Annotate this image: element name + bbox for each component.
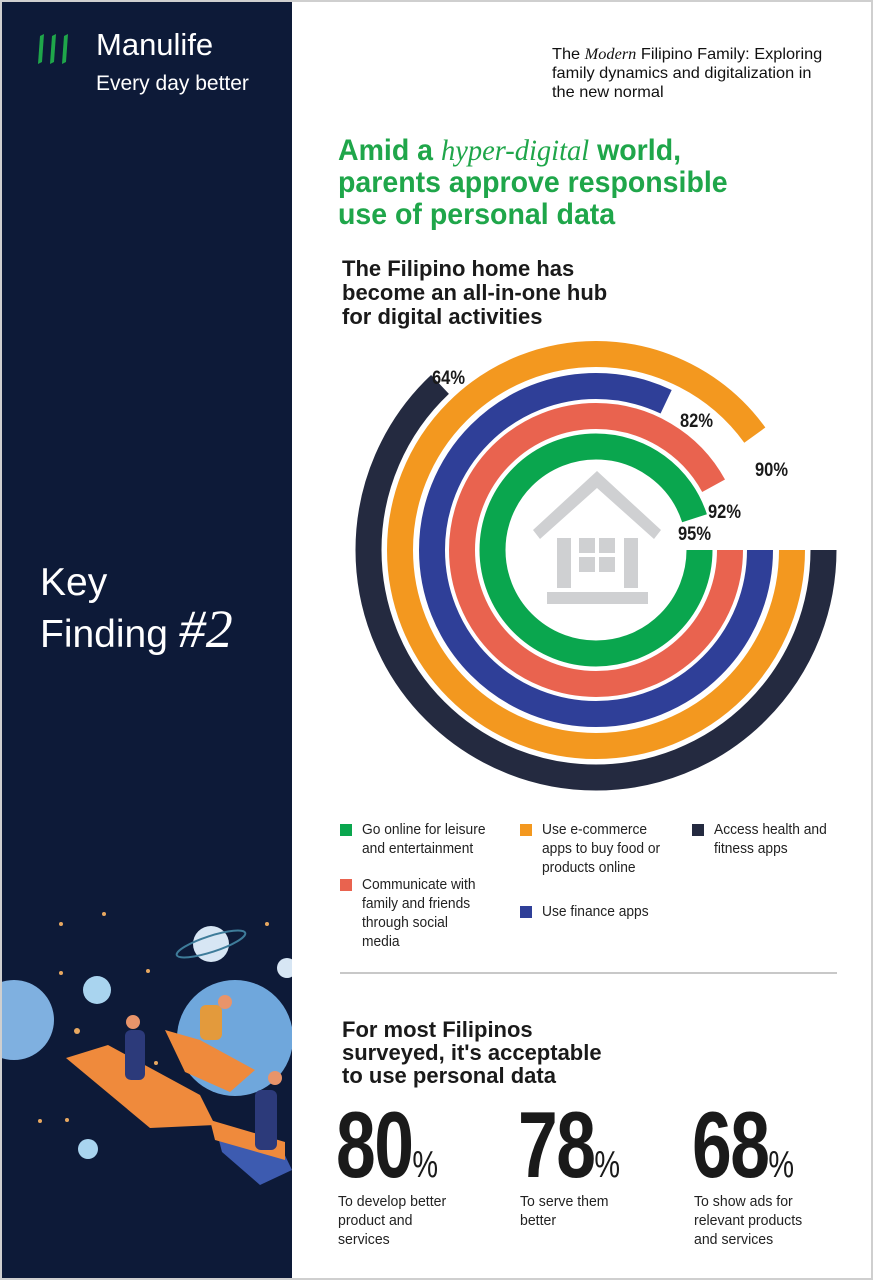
- legend: Communicate with: [362, 876, 476, 893]
- legend: family and friends: [362, 895, 470, 912]
- key finding heading: Key: [40, 561, 107, 604]
- legend: and entertainment: [362, 840, 473, 857]
- chart value labels: 64%: [432, 368, 465, 389]
- section heading: personal data: For most Filipinos: [342, 1017, 533, 1042]
- subheading: become an all-in-one hub: [342, 280, 607, 305]
- chart value labels: 95%: [678, 524, 711, 545]
- stat 80%: To develop better: [338, 1193, 446, 1210]
- main headline: [338, 134, 728, 231]
- stat 68%: and services: [694, 1231, 773, 1248]
- stat 80%: [336, 1092, 446, 1248]
- illustration: space rockets: [2, 912, 292, 1185]
- stat 78%: 78%: [518, 1092, 620, 1197]
- legend: [340, 821, 827, 950]
- stat 80%: product and: [338, 1212, 412, 1229]
- stat 68%: To show ads for: [694, 1193, 793, 1210]
- report title: family dynamics and digitalization in: [552, 65, 811, 82]
- legend: Access health and: [714, 821, 827, 838]
- report title: The Modern Filipino Family: Exploring: [552, 46, 822, 63]
- chart value labels: 82%: [680, 411, 713, 432]
- stat 68%: relevant products: [694, 1212, 802, 1229]
- legend: through social: [362, 914, 448, 931]
- legend: Use e-commerce: [542, 821, 647, 838]
- stat 68%: [692, 1092, 802, 1248]
- subheading: [342, 256, 607, 329]
- report title: the new normal: [552, 84, 664, 101]
- key finding heading: [40, 561, 233, 659]
- report title: [552, 46, 822, 101]
- stat 80%: 80%: [336, 1092, 438, 1197]
- left panel: [0, 0, 292, 1280]
- main headline: parents approve responsible: [338, 166, 728, 199]
- legend: apps to buy food or: [542, 840, 660, 857]
- section heading: personal data: surveyed, it's acceptable: [342, 1040, 602, 1065]
- legend: products online: [542, 859, 636, 876]
- subheading: for digital activities: [342, 304, 542, 329]
- stat 80%: services: [338, 1231, 390, 1248]
- legend: media: [362, 933, 400, 950]
- main headline: Amid a hyper-digital world,: [338, 134, 681, 167]
- legend: fitness apps: [714, 840, 788, 857]
- stat 68%: 68%: [692, 1092, 794, 1197]
- chart value labels: 90%: [755, 460, 788, 481]
- section heading: personal data: to use personal data: [342, 1063, 556, 1088]
- logo: [38, 27, 249, 95]
- radial bar chart: [356, 341, 836, 790]
- subheading: The Filipino home has: [342, 256, 574, 281]
- main headline: use of personal data: [338, 198, 615, 231]
- legend: Use finance apps: [542, 903, 649, 920]
- legend: Go online for leisure: [362, 821, 486, 838]
- divider: [340, 972, 837, 974]
- logo: Every day better: [96, 72, 249, 95]
- chart value labels: [432, 368, 788, 545]
- chart value labels: 92%: [708, 502, 741, 523]
- key finding heading: Finding #2: [40, 599, 233, 659]
- section heading: personal data: [342, 1017, 602, 1088]
- stat 78%: To serve them: [520, 1193, 609, 1210]
- icon: house: [533, 471, 661, 604]
- stat 78%: better: [520, 1212, 556, 1229]
- logo: Manulife: [96, 27, 213, 62]
- icon: logo stripes: [38, 34, 68, 64]
